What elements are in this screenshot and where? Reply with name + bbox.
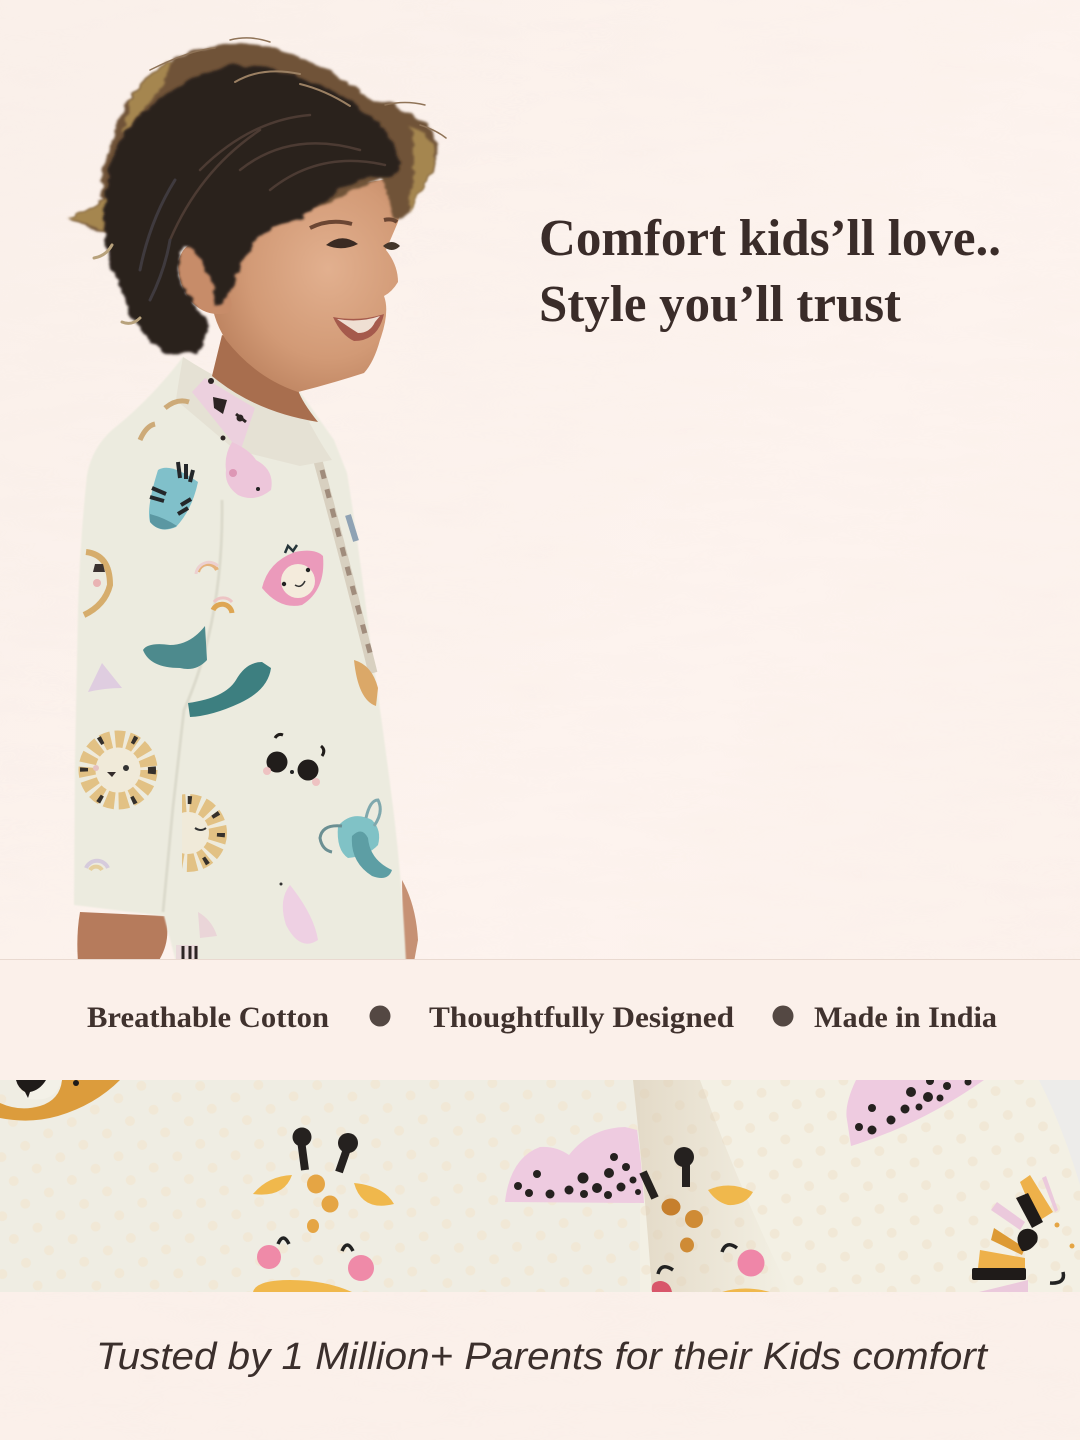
lion bottom right xyxy=(972,1175,1074,1292)
lion fragment top left xyxy=(0,1080,120,1121)
bullet two xyxy=(772,1006,794,1026)
smile xyxy=(333,314,384,341)
feature: made in india: Made in India xyxy=(814,1001,997,1034)
print: hippo xyxy=(226,442,272,498)
feature: thoughtfully designed: Thoughtfully Designed xyxy=(429,1001,734,1034)
photo: smiling child in printed kurta xyxy=(70,38,446,962)
print: elephant xyxy=(320,800,392,878)
feature: breathable cotton: Breathable Cotton xyxy=(87,1001,329,1034)
neck xyxy=(212,335,318,422)
print: crocodile left xyxy=(143,626,207,669)
giraffe centre xyxy=(643,1147,770,1292)
brown outer hair xyxy=(70,44,437,240)
kurta placket xyxy=(313,443,373,673)
blonde wisps xyxy=(70,62,436,232)
print: body lion xyxy=(182,794,227,872)
print: triangle xyxy=(88,663,122,692)
heading xyxy=(539,210,1001,333)
fabric photo strip xyxy=(0,1077,1080,1292)
print: button tiger xyxy=(354,660,378,706)
giraffe left xyxy=(253,1128,394,1292)
print: crocodile right xyxy=(188,662,271,717)
pink cloud top right xyxy=(846,1077,984,1146)
print: rainbows xyxy=(86,562,232,870)
child far hand xyxy=(402,880,418,962)
feature strip xyxy=(0,959,1080,1080)
print: panda xyxy=(263,734,324,786)
hair xyxy=(70,38,446,354)
bullet one xyxy=(370,1006,390,1026)
print: zebra xyxy=(149,462,198,530)
heading: Style you’ll trust xyxy=(539,276,902,333)
child near hand xyxy=(77,912,167,962)
fabric right corner xyxy=(1049,1080,1080,1143)
ear xyxy=(178,246,214,314)
print: sleeve lion xyxy=(84,736,152,804)
hair strands xyxy=(94,38,446,323)
print: bottom pink xyxy=(176,882,318,961)
fabric fold xyxy=(633,1080,746,1292)
dark hair mass xyxy=(104,65,399,354)
face xyxy=(211,180,400,392)
kurta body xyxy=(74,357,406,962)
print: monkey xyxy=(262,545,323,606)
heading: Comfort kids’ll love.. xyxy=(539,210,1001,267)
kurta collar xyxy=(140,357,332,466)
pink cloud centre xyxy=(505,1127,644,1203)
footer band xyxy=(0,1292,1080,1440)
eyes and brows xyxy=(310,219,400,250)
footer tagline: Tusted by 1 Million+ Parents for their Kids comfort xyxy=(96,1336,989,1378)
print: sleeve lion fragment xyxy=(84,552,110,615)
